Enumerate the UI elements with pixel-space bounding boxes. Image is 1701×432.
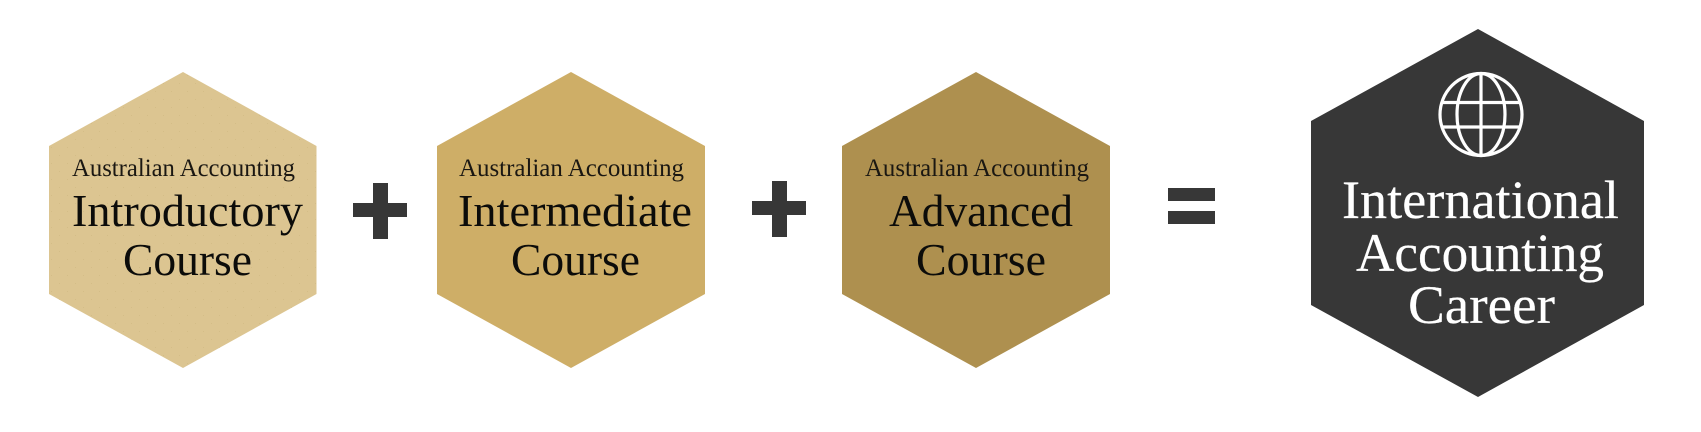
hexagon: career background xyxy=(1311,29,1644,397)
icon: first plus sign xyxy=(353,183,407,239)
hexagon: intermediate background xyxy=(437,72,705,368)
text: advanced subtitle: Australian Accounting xyxy=(865,155,1089,182)
text: career title line one: International xyxy=(1342,170,1619,230)
panel: introductory course hexagon xyxy=(49,72,316,368)
panel: advanced course hexagon xyxy=(842,72,1110,368)
icon: equals sign xyxy=(1168,188,1215,224)
icon: globe xyxy=(1440,74,1522,156)
text: advanced title line two: Course xyxy=(916,234,1046,285)
panel: intermediate course hexagon xyxy=(437,72,705,368)
hexagon: advanced background xyxy=(842,72,1110,368)
text: intermediate subtitle: Australian Accounting xyxy=(459,155,684,182)
text: career title line two: Accounting xyxy=(1356,223,1604,283)
text: introductory subtitle: Australian Accounting xyxy=(72,155,295,182)
text: introductory title line two: Course xyxy=(123,234,252,285)
text: advanced title line one: Advanced xyxy=(889,185,1073,236)
hexagon: introductory background xyxy=(49,72,316,368)
text: intermediate title line one: Intermediate xyxy=(458,185,692,236)
icon: second plus sign xyxy=(752,181,806,237)
text: career title line three: Career xyxy=(1408,275,1555,335)
panel: international accounting career hexagon xyxy=(1311,29,1644,397)
text: intermediate title line two: Course xyxy=(511,234,640,285)
text: introductory title line one: Introductory xyxy=(72,185,303,236)
